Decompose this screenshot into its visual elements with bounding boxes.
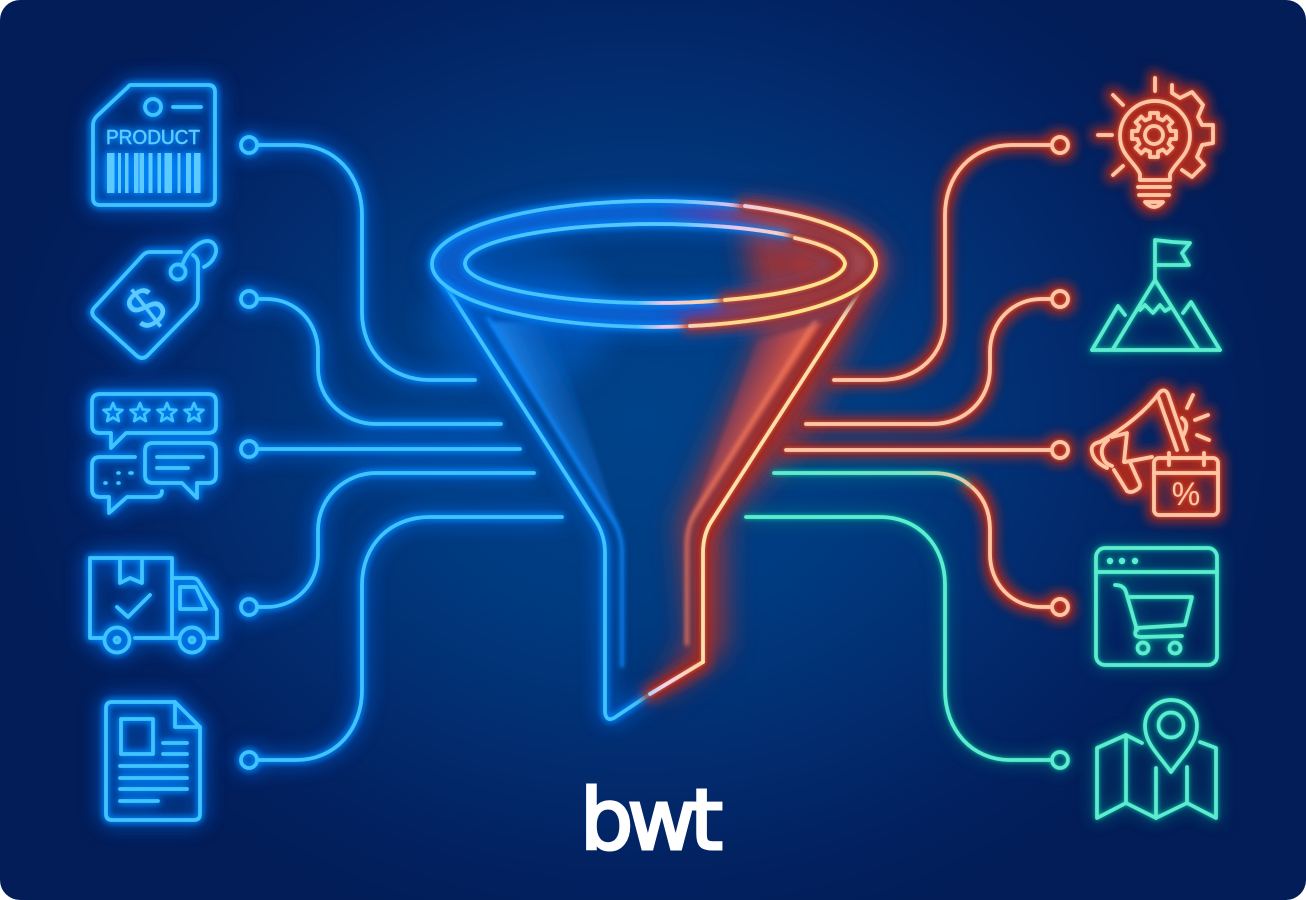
connector 1 right [834,137,1068,380]
icon: price tag: $ [113,273,179,344]
icon: mountain with flag [1092,240,1220,350]
connector 2 left [241,291,501,424]
funnel hole red bleed [794,235,850,291]
right connectors [746,137,1068,768]
connector 5 left [241,517,562,768]
icon: document [106,702,200,820]
connector 4 left [241,473,534,615]
icon: lightbulb with gears [1098,78,1213,207]
icon: product barcode label [93,85,215,205]
icon: map with location pin [1097,700,1216,818]
connector 5 right [746,517,1068,768]
funnel right rear edge [687,322,815,644]
funnel inner rim [465,224,845,303]
icon: delivery truck [90,558,217,652]
funnel right inner shading [690,322,822,525]
funnel left rear edge [488,318,622,666]
left connectors [241,137,562,768]
funnel left inner shading [490,322,620,530]
logo: bwt: bwt [580,771,721,869]
connector 3 right [786,442,1068,458]
icon: online shopping cart [1096,548,1217,665]
funnel ambient glow [430,205,890,705]
connector 4 right [968,484,1068,615]
connector 1 left [241,137,475,380]
connector 4 right teal run [774,473,968,484]
funnel [430,200,890,719]
icon: megaphone and promo calendar [1092,390,1218,515]
icon: product barcode label: PRODUCT [106,127,200,149]
icon: megaphone and promo calendar: % [1172,476,1200,512]
icon: price tag [92,241,216,358]
funnel left outline [445,285,650,719]
connector 3 left [241,441,520,457]
icon: review speech bubbles [92,394,216,513]
funnel rim warm overlay [690,206,876,326]
connector 2 right [806,291,1068,424]
funnel right outline [650,286,863,694]
funnel ring fill [430,200,878,328]
funnel outer rim [432,201,876,327]
